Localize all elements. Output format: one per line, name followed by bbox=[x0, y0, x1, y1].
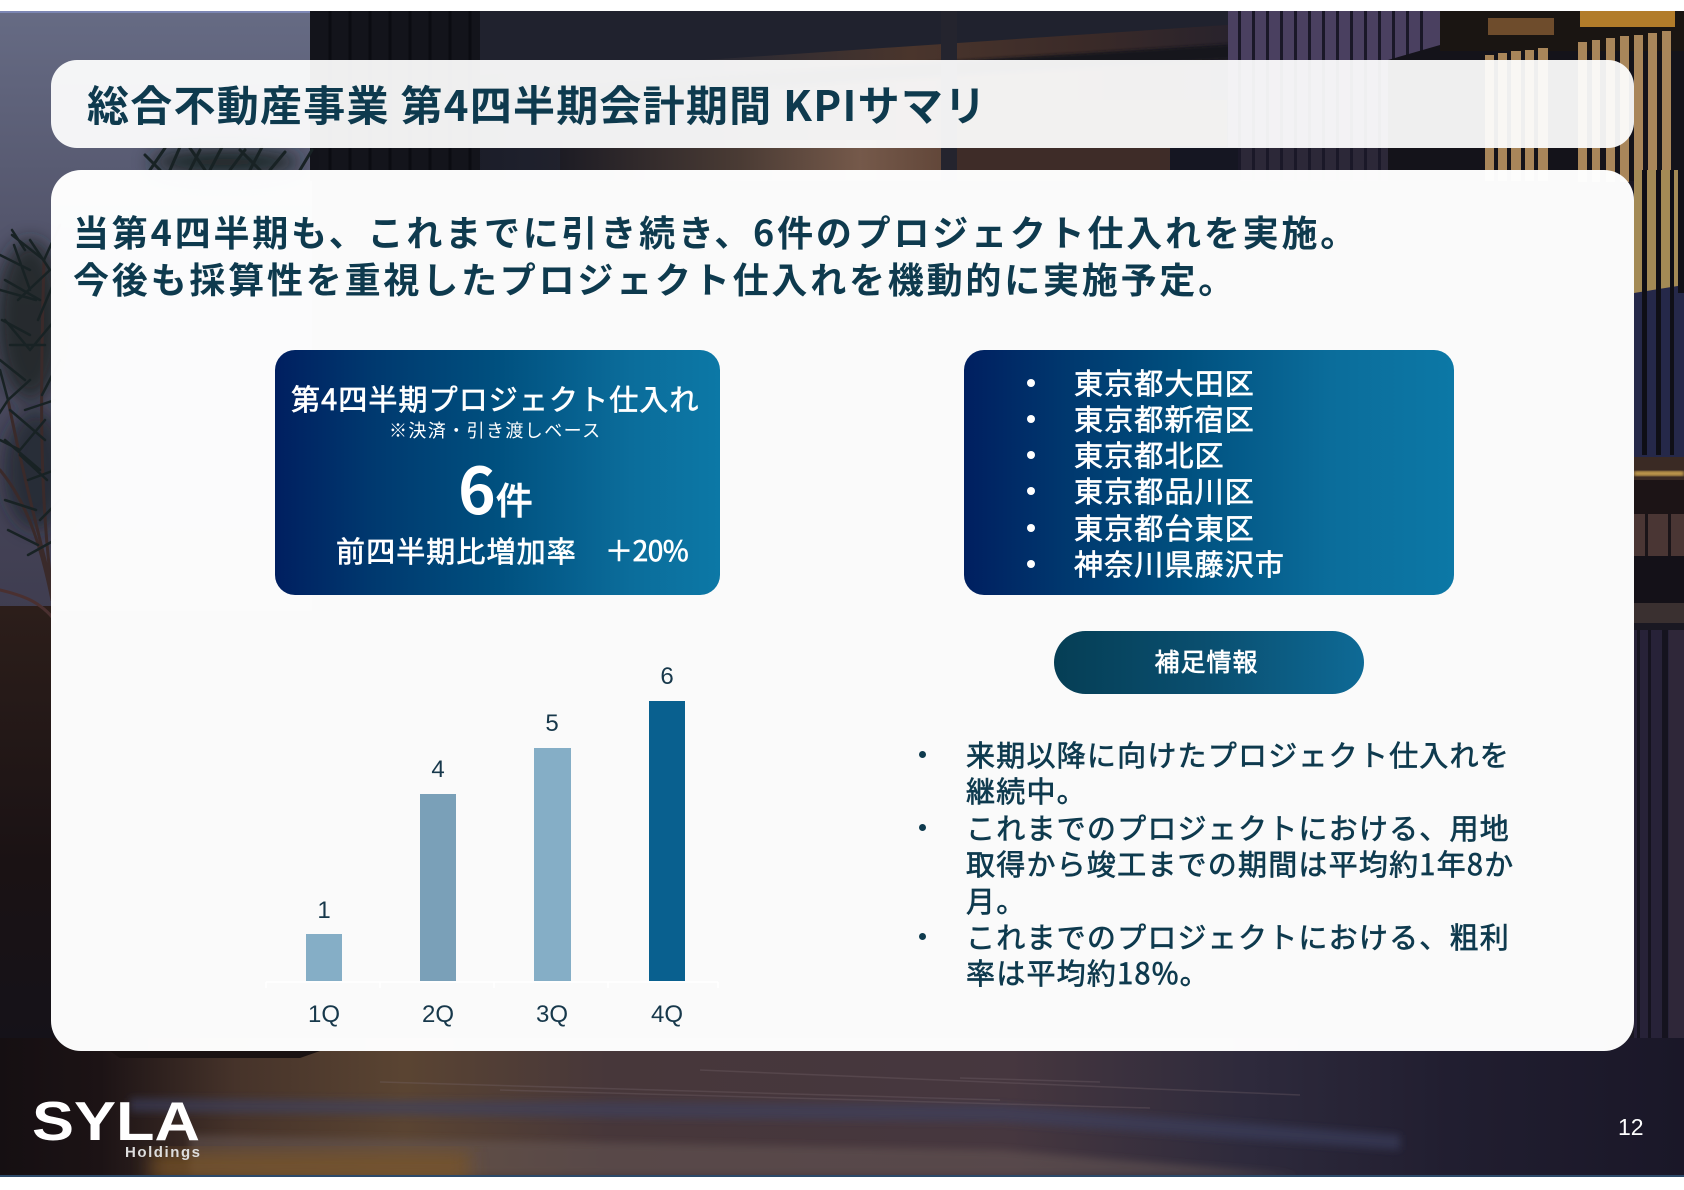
lead text block: 当第4四半期も、これまでに引き続き、6件のプロジェクト仕入れを実施。 bbox=[73, 205, 1359, 257]
bar: 4Q bbox=[649, 663, 685, 1028]
bullet: average period: 取得から竣工までの期間は平均約1年8か bbox=[966, 842, 1514, 884]
main content panel bbox=[51, 170, 1634, 1051]
location item 3: 東京都北区 bbox=[1074, 433, 1225, 475]
card: project locations list bbox=[964, 350, 1454, 595]
bar: 2Q: 4 bbox=[431, 756, 445, 783]
location item 5: 東京都台東区 bbox=[1074, 506, 1255, 548]
bullet: average gross margin: 率は平均約18%。 bbox=[966, 951, 1210, 993]
bar: 3Q: 5 bbox=[545, 710, 559, 737]
supplementary bullet list bbox=[919, 733, 1514, 993]
bullet: average period bbox=[919, 806, 1514, 921]
bullet: average gross margin: これまでのプロジェクトにおける、粗利 bbox=[966, 915, 1510, 957]
bullet: average period: これまでのプロジェクトにおける、用地 bbox=[966, 806, 1510, 848]
heading: page title: 総合不動産事業 第4四半期会計期間 KPIサマリ bbox=[87, 73, 987, 134]
KPI change: +20%: 前四半期比増加率 bbox=[336, 529, 577, 571]
KPI value: 6件: 6件 bbox=[458, 441, 533, 533]
KPI card: purchases this quarter: ＋20% bbox=[605, 530, 688, 570]
card note: ※決済・引き渡しベース bbox=[389, 417, 602, 443]
location item 6: 神奈川県藤沢市 bbox=[1074, 542, 1285, 584]
card heading: 第4四半期プロジェクト仕入れ bbox=[291, 377, 700, 419]
bar: 1Q: 1Q bbox=[308, 1001, 340, 1028]
bar: 1Q bbox=[306, 897, 342, 1028]
location item 4: 東京都品川区 bbox=[1074, 469, 1255, 511]
page number: 12 bbox=[1618, 1114, 1644, 1140]
bar: 2Q: 2Q bbox=[422, 1001, 454, 1028]
KPI change: +20% bbox=[336, 529, 688, 571]
pill heading: supplementary information bbox=[1054, 631, 1364, 694]
bar: 3Q: 3Q bbox=[536, 1001, 568, 1028]
bullet: average gross margin bbox=[919, 915, 1510, 993]
bar: 3Q bbox=[534, 710, 571, 1028]
title bar panel bbox=[51, 60, 1634, 148]
bullet: average period: 月。 bbox=[966, 879, 1026, 921]
bar: 1Q: 1 bbox=[317, 897, 331, 924]
lead text block bbox=[73, 205, 1359, 304]
bar: 2Q bbox=[420, 756, 456, 1028]
pill heading: supplementary information: 補足情報 bbox=[1154, 643, 1258, 679]
bar: 4Q: 4Q bbox=[651, 1001, 683, 1028]
lead text block: 今後も採算性を重視したプロジェクト仕入れを機動的に実施予定。 bbox=[73, 252, 1237, 304]
bullet: continued purchases: 来期以降に向けたプロジェクト仕入れを bbox=[966, 733, 1510, 775]
logo: SYLA Holdings: Holdings bbox=[125, 1144, 200, 1161]
bullet: continued purchases bbox=[919, 733, 1510, 811]
KPI card: purchases this quarter bbox=[275, 350, 720, 595]
bullet: continued purchases: 継続中。 bbox=[966, 769, 1087, 811]
location item 1: 東京都大田区 bbox=[1074, 361, 1255, 403]
bar chart: quarterly project purchases bbox=[306, 663, 685, 1028]
location item 2: 東京都新宿区 bbox=[1074, 397, 1255, 439]
bar: 4Q: 6 bbox=[660, 663, 674, 690]
